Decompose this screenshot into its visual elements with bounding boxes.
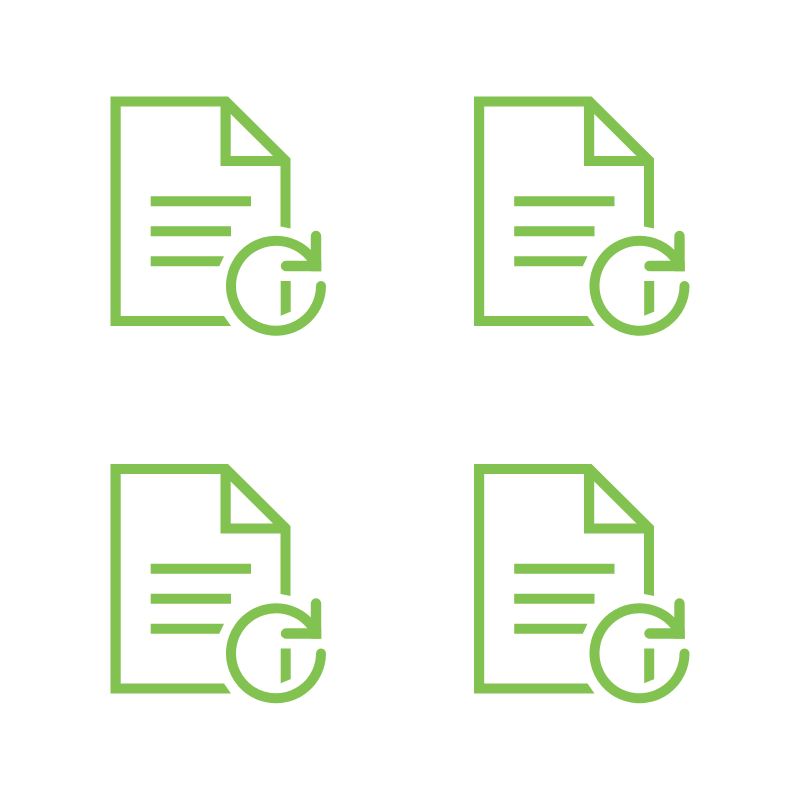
icon: document refresh, top right (474, 96, 685, 331)
icon: document refresh, top left (110, 96, 321, 331)
icon: document refresh, bottom left (110, 464, 321, 698)
icon: document refresh, bottom right (474, 464, 685, 698)
